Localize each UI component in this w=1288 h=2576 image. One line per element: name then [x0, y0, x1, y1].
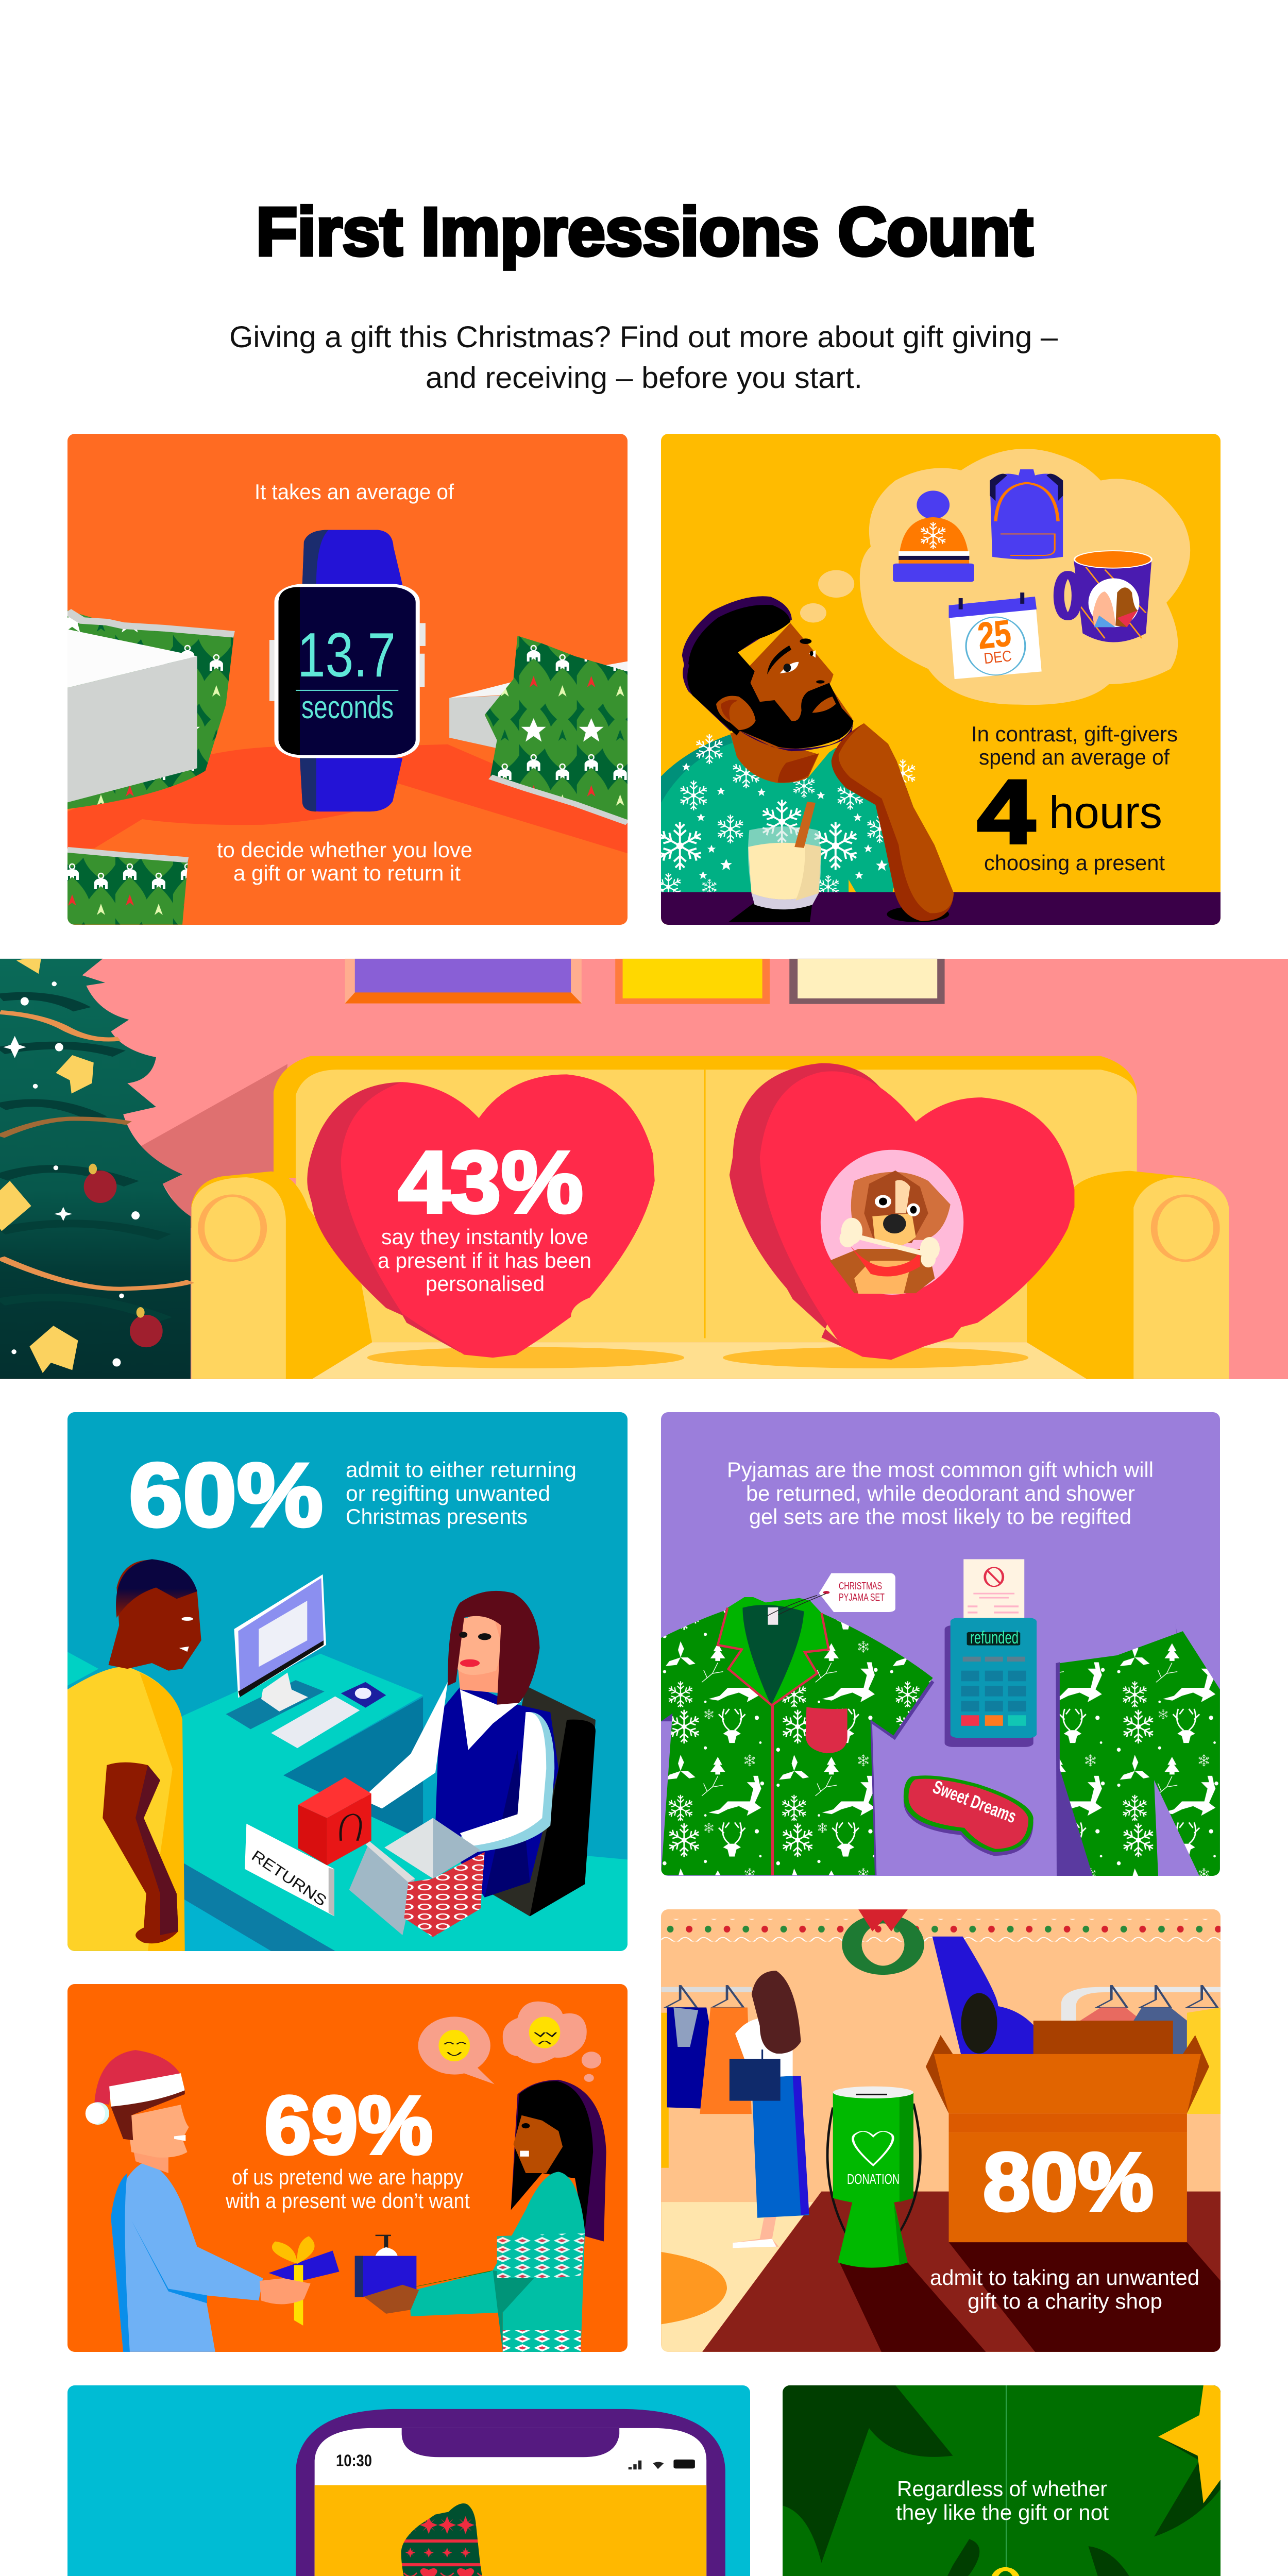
- illustration: living room: [0, 959, 1229, 1379]
- text: pyjamas are the most common: Pyjamas are the most common gift which will: [727, 1458, 1154, 1482]
- text: charity shop: admit to taking an unwanted: [930, 2265, 1199, 2290]
- illustration: socks photo and post icons: [329, 2503, 689, 2576]
- illustration: gifts and watch: [67, 530, 628, 925]
- text: regardless: Regardless of whether: [897, 2477, 1107, 2501]
- gift tag: CHRISTMAS: [839, 1581, 882, 1592]
- text: gift givers: [971, 722, 1178, 875]
- panel: 4 hours: [654, 434, 1229, 926]
- text: pyjamas are the most common: be returned, while deodorant and shower: [746, 1481, 1135, 1505]
- text: to decide: [217, 838, 472, 885]
- sleep mask text: Sweet Dreams: [930, 1776, 1020, 1827]
- text: returning or regifting: or regifting unwanted: [346, 1481, 550, 1505]
- stat: 4 hours: hours: [1049, 787, 1162, 838]
- phone status and post text: 10:30: [336, 2451, 372, 2470]
- gift tag: PYJAMA SET: [839, 1592, 885, 1603]
- stat: 43%: 43%: [398, 1133, 583, 1231]
- text: charity shop: [930, 2265, 1199, 2313]
- calendar date: DEC: [983, 648, 1012, 667]
- subtitle: [229, 320, 1058, 395]
- stat: 4 hours: [977, 762, 1162, 862]
- illustration: thinking man with eggnog: [654, 596, 1229, 926]
- panel: 34% caught regifting: [67, 2385, 750, 2576]
- illustration: refund terminal and sleep mask: [819, 1559, 1037, 1856]
- title: First Impressions Count: [256, 194, 1033, 269]
- subtitle: Giving a gift this Christmas? Find out more about gift giving –: [229, 320, 1058, 354]
- illustration: pyjama shirt and trousers: [661, 1594, 1220, 1876]
- illustration: gift exchange: [86, 2002, 606, 2352]
- calendar date: [976, 613, 1014, 668]
- illustration: phone frame: [296, 2409, 725, 2576]
- text: returning or regifting: [346, 1458, 577, 1529]
- text: pretend happy: [225, 2165, 470, 2213]
- band: sofa with 43% heart: [0, 959, 1288, 1379]
- panel: 60% returns desk: [67, 1412, 628, 1951]
- text: personalised: personalised: [426, 1272, 545, 1296]
- stat: 80%: 80%: [983, 2136, 1154, 2228]
- panel: 80% charity shop: [661, 1909, 1221, 2352]
- gift tag: [839, 1581, 885, 1603]
- text: gift givers: In contrast, gift-givers: [971, 722, 1178, 746]
- calendar date: 25: [976, 613, 1013, 657]
- text: regardless: [896, 2477, 1109, 2524]
- text: to decide: a gift or want to return it: [233, 861, 461, 885]
- stat: 69%: 69%: [264, 2079, 433, 2171]
- text: charity shop: gift to a charity shop: [968, 2289, 1162, 2313]
- subtitle: and receiving – before you start.: [426, 361, 862, 395]
- illustration: tree and bauble: [783, 2385, 1224, 2576]
- text: returning or regifting: admit to either returning: [346, 1458, 577, 1482]
- illustration: thought cloud of gift ideas: [800, 449, 1190, 705]
- text: to decide: to decide whether you love: [217, 838, 472, 862]
- watch reading: 13.7: [297, 620, 396, 690]
- stat: 4 hours: 4: [977, 762, 1035, 862]
- terminal screen: refunded: [970, 1628, 1019, 1648]
- text: pyjamas are the most common: [727, 1458, 1154, 1529]
- text: it takes an average of: It takes an average of: [255, 480, 454, 504]
- panel: 13.7 seconds watch: [67, 434, 628, 925]
- text: pyjamas are the most common: gel sets are the most likely to be regifted: [749, 1504, 1131, 1529]
- text: personalised: [378, 1225, 591, 1296]
- text: personalised: say they instantly love: [381, 1225, 588, 1249]
- illustration: returns counter: [67, 1559, 628, 1951]
- illustration: shop and donation box: [661, 1937, 1221, 2352]
- text: pretend happy: of us pretend we are happy: [232, 2165, 463, 2189]
- panel: 69% pretend happy: [67, 1984, 628, 2352]
- sign text: RETURNS: [248, 1847, 330, 1910]
- panel: pyjamas: [661, 1412, 1220, 1876]
- text: regardless: they like the gift or not: [896, 2500, 1109, 2524]
- text: gift givers: spend an average of: [979, 745, 1170, 769]
- donation box label: DONATION: [847, 2171, 900, 2187]
- illustration: garland and wreath: [661, 1909, 1221, 1970]
- panel: 13.7 seconds watch: seconds: [301, 690, 394, 725]
- stat: 60%: 60%: [129, 1445, 323, 1546]
- panel: 85% thankful bauble: [783, 2385, 1224, 2576]
- text: gift givers: choosing a present: [984, 851, 1165, 875]
- text: returning or regifting: Christmas presents: [346, 1504, 528, 1529]
- text: pretend happy: with a present we don’t want: [225, 2189, 470, 2213]
- text: personalised: a present if it has been: [378, 1248, 591, 1273]
